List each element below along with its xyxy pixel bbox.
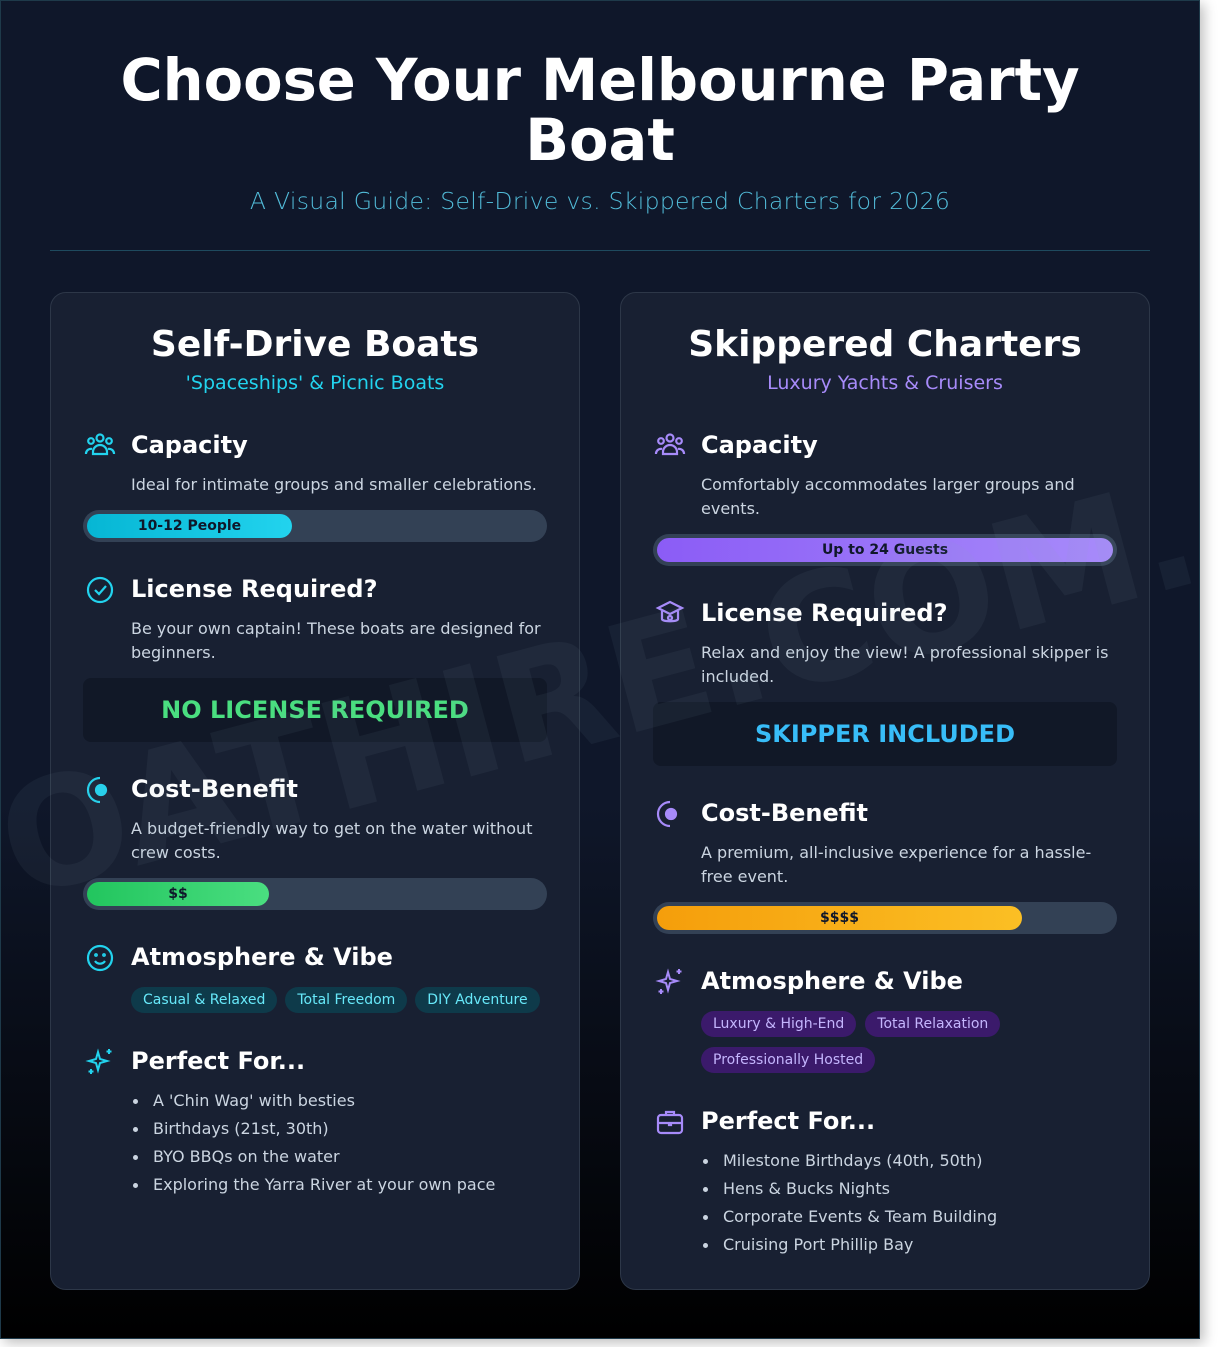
card subtitle: 'Spaceships' & Picnic Boats — [186, 372, 444, 394]
heading: atmosphere: Atmosphere & Vibe — [131, 943, 393, 971]
list: perfect for: Birthdays (21st, 30th) — [153, 1119, 329, 1138]
tags: vibe: Total Freedom — [297, 992, 395, 1008]
icon: check — [86, 576, 114, 604]
text: cost: A budget-friendly way to get on the water without crew costs. — [131, 819, 532, 862]
tags: vibe: Total Relaxation — [877, 1016, 988, 1032]
panel: self-drive boats — [50, 292, 580, 1290]
bar: cost: $$ — [168, 886, 188, 902]
callout: no license — [83, 678, 547, 742]
list: perfect for: Hens & Bucks Nights — [723, 1179, 890, 1198]
heading: perfect for: Perfect For... — [701, 1107, 875, 1135]
icon: sparkles — [86, 1048, 112, 1074]
list: perfect for: BYO BBQs on the water — [153, 1147, 340, 1166]
icon: sparkles — [656, 968, 682, 994]
icon: coin — [86, 776, 108, 804]
list: perfect for — [133, 1091, 495, 1194]
tags: vibe: Luxury & High-End — [713, 1016, 844, 1032]
list: perfect for: Corporate Events & Team Building — [723, 1207, 997, 1226]
icon: briefcase — [656, 1110, 684, 1134]
bar: capacity — [653, 534, 1117, 566]
list: perfect for: A 'Chin Wag' with besties — [153, 1091, 355, 1110]
bar: cost — [83, 878, 547, 910]
heading: perfect for: Perfect For... — [131, 1047, 305, 1075]
tags: vibe — [131, 987, 540, 1013]
tags: vibe: Casual & Relaxed — [143, 992, 265, 1008]
panel: skippered charters — [620, 292, 1150, 1290]
tags: vibe: DIY Adventure — [427, 992, 528, 1008]
heading: atmosphere: Atmosphere & Vibe — [701, 967, 963, 995]
tags: vibe: Professionally Hosted — [713, 1052, 863, 1068]
list: perfect for: Exploring the Yarra River at your own pace — [153, 1175, 495, 1194]
list: perfect for: Milestone Birthdays (40th, 50th) — [723, 1151, 982, 1170]
bar: capacity: Up to 24 Guests — [822, 542, 948, 558]
card title: Self-Drive Boats — [151, 324, 479, 365]
heading: license: License Required? — [701, 599, 948, 627]
list: perfect for — [703, 1151, 997, 1254]
icon: group — [654, 433, 686, 456]
callout: no license: NO LICENSE REQUIRED — [161, 696, 469, 724]
tags: vibe — [701, 1011, 1000, 1073]
heading: cost: Cost-Benefit — [701, 799, 868, 827]
title: Choose Your Melbourne Party — [120, 47, 1080, 114]
text: license: Be your own captain! These boats are designed for beginners. — [131, 619, 541, 662]
title — [120, 47, 1080, 174]
card title: Skippered Charters — [688, 324, 1082, 365]
callout: skipper included — [653, 702, 1117, 766]
text: capacity: Comfortably accommodates larger groups and events. — [701, 475, 1075, 518]
bar: cost: $$$$ — [820, 910, 859, 926]
bar: capacity: 10-12 People — [138, 518, 241, 534]
icon: smile — [86, 944, 114, 972]
title: Boat — [525, 107, 675, 174]
heading: license: License Required? — [131, 575, 378, 603]
text: capacity: Ideal for intimate groups and smaller celebrations. — [131, 475, 537, 494]
bar: cost — [653, 902, 1117, 934]
heading: capacity: Capacity — [701, 431, 818, 459]
card subtitle: Luxury Yachts & Cruisers — [767, 372, 1003, 394]
callout: skipper included: SKIPPER INCLUDED — [755, 720, 1015, 748]
list: perfect for: Cruising Port Phillip Bay — [723, 1235, 913, 1254]
subtitle: A Visual Guide: Self-Drive vs. Skippered Charters for 2026 — [250, 187, 950, 215]
icon: captain hat — [656, 600, 684, 622]
text: cost: A premium, all-inclusive experience for a hassle-free event. — [701, 843, 1091, 886]
text: license: Relax and enjoy the view! A professional skipper is included. — [701, 643, 1108, 686]
icon: coin — [656, 800, 678, 828]
bar: capacity — [83, 510, 547, 542]
heading: cost: Cost-Benefit — [131, 775, 298, 803]
heading: capacity: Capacity — [131, 431, 248, 459]
icon: group — [84, 433, 116, 456]
